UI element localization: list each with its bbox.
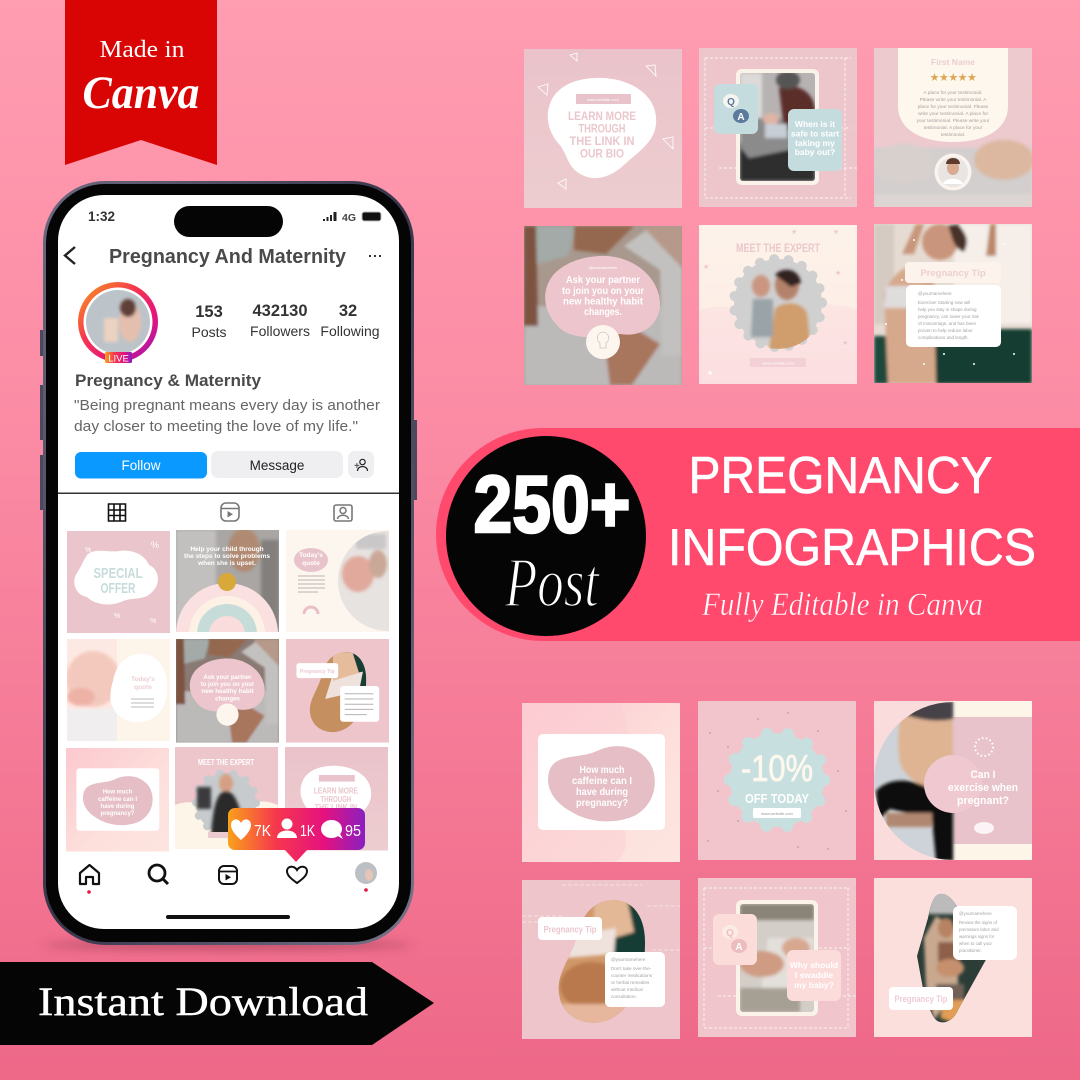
thumbnail: rainbow tip: when she is upset. xyxy=(197,560,256,567)
tile: pregnancy tip diamond: Pregnancy Tip xyxy=(894,994,948,1004)
tile: testimonial xyxy=(874,48,1034,208)
tile: pregnancy tip exercise: @yournamehere xyxy=(918,291,952,296)
thumbnail: today's quote: Today's xyxy=(299,552,323,559)
bio xyxy=(74,371,380,435)
stats: 153 xyxy=(195,303,223,321)
thumbnail: pregnancy tip: Pregnancy Tip xyxy=(300,669,335,675)
status bar: 1:32 xyxy=(88,209,115,224)
status bar xyxy=(88,206,381,237)
stats: 432130 xyxy=(252,302,308,320)
tile: meet the expert: ★ xyxy=(833,228,839,236)
thumbnail: caffeine question xyxy=(66,748,169,852)
thumbnail: today's quote xyxy=(286,530,389,632)
tile: ask your partner: new healthy habit xyxy=(563,296,644,308)
tile: question with stroller photo: taking my xyxy=(795,138,835,148)
avatar with live badge xyxy=(78,282,158,364)
thumbnail: baby quote: Today's xyxy=(131,676,155,683)
thumbnail: special offer: SPECIAL xyxy=(94,565,142,582)
tile: pregnancy tip diamond xyxy=(874,878,1032,1037)
title text: PREGNANCY xyxy=(688,447,992,505)
tile: testimonial: place for your testimonial. Please xyxy=(918,104,989,110)
thumbnail: caffeine question: have during xyxy=(101,803,134,810)
bio: day closer to meeting the love of my life." xyxy=(74,418,358,435)
thumbnail: special offer xyxy=(67,531,170,633)
tile: pregnancy tip exercise: Exercise! Starting now will xyxy=(918,300,970,305)
tile: question with stroller photo: A xyxy=(737,112,745,123)
tile: ask your partner xyxy=(524,226,682,386)
tile: ask your partner: Ask your partner xyxy=(566,275,640,286)
tile: swaddle question: Why should xyxy=(790,960,838,970)
bio: Pregnancy & Maternity xyxy=(75,371,262,390)
tile: swaddle question: my baby? xyxy=(794,980,834,990)
tile: caffeine question: pregnancy? xyxy=(576,798,628,809)
tab bar xyxy=(58,492,399,521)
tile: caffeine question: caffeine can I xyxy=(572,776,632,787)
thumbnail: baby quote: quote xyxy=(134,684,152,691)
bottom template group xyxy=(522,701,1032,1039)
tile: pregnancy tip belly xyxy=(522,880,681,1039)
ribbon: Made in Canva: Made in xyxy=(100,37,184,63)
phone post grid xyxy=(66,528,389,852)
thumbnail: rainbow tip: Help your child through xyxy=(190,546,264,553)
tile: question with stroller photo: Q xyxy=(727,97,735,108)
bio: "Being pregnant means every day is another xyxy=(74,397,380,414)
tile: testimonial: write your testimonial. A place for xyxy=(918,111,988,117)
tile: pregnancy tip exercise: proven to help reduce labor xyxy=(918,328,973,333)
tile: testimonial: First Name xyxy=(931,57,975,67)
tile: meet the expert: ★ xyxy=(791,228,797,236)
engagement bubble: 1K xyxy=(300,823,315,840)
tile: pregnancy tip diamond: practitioner. xyxy=(959,948,982,953)
tile: learn more: www.website.com xyxy=(587,97,620,102)
tile: pregnancy tip exercise xyxy=(874,224,1032,384)
tile: discount: -10% xyxy=(741,748,813,789)
phone mockup xyxy=(40,181,417,949)
stats: Posts xyxy=(191,324,227,340)
tile: ask your partner: to join you on your xyxy=(562,286,644,297)
tile: exercise question: exercise when xyxy=(948,782,1018,794)
thumbnail: special offer: % xyxy=(85,547,91,554)
tile: pregnancy tip diamond: when to call your xyxy=(959,941,992,946)
tile: pregnancy tip exercise: help you stay in shape during xyxy=(918,307,977,312)
tile: learn more: LEARN MORE xyxy=(568,109,636,123)
ribbon: Made in Canva: Canva xyxy=(82,67,200,119)
tile: meet the expert: MEET THE EXPERT xyxy=(736,241,821,255)
thumbnail: special offer: % xyxy=(150,618,156,625)
tile: meet the expert: ★ xyxy=(707,369,713,377)
engagement bubble: 95 xyxy=(345,823,361,840)
tile: pregnancy tip belly: Pregnancy Tip xyxy=(544,924,597,934)
stats: Followers xyxy=(250,323,310,339)
tile: caffeine question xyxy=(522,703,681,862)
tile: caffeine question: have during xyxy=(576,787,628,798)
tile: discount xyxy=(698,701,857,860)
top template group xyxy=(524,48,1034,386)
thumbnail: caffeine question: How much xyxy=(103,789,132,796)
tile: meet the expert: ★ xyxy=(835,269,841,277)
engagement bubble xyxy=(228,808,365,862)
tile: exercise question: pregnant? xyxy=(957,795,1009,807)
tile: question with stroller photo: safe to start xyxy=(791,128,839,138)
avatar with live badge: LIVE xyxy=(108,354,129,364)
tile: exercise question: Can I xyxy=(970,769,996,781)
tile: discount: OFF TODAY xyxy=(745,791,809,806)
bottom navigation xyxy=(80,862,377,919)
tile: learn more: OUR BIO xyxy=(580,146,624,160)
tile: learn more: THE LINK IN xyxy=(570,134,634,148)
tile: testimonial: your testimonial. Please write your xyxy=(916,118,990,124)
tile: learn more: THROUGH xyxy=(578,122,626,136)
tile: pregnancy tip belly: counter medications xyxy=(611,973,653,978)
tile: meet the expert: www.website.com xyxy=(762,360,795,366)
tile: ask your partner: changes. xyxy=(584,307,622,318)
badge: 250+ post: Post xyxy=(504,545,600,622)
banner: instant download xyxy=(0,962,434,1045)
thumbnail: baby quote xyxy=(66,639,170,741)
status bar: 4G xyxy=(342,212,356,224)
title text: INFOGRAPHICS xyxy=(668,519,1036,577)
tile: meet the expert xyxy=(699,225,857,385)
thumbnail: rainbow tip xyxy=(176,530,279,632)
tile: pregnancy tip diamond: @yournamehere xyxy=(959,911,992,916)
thumbnail: meet the expert xyxy=(175,747,278,849)
tile: pregnancy tip belly: Don't take over-the- xyxy=(611,966,652,971)
tile: pregnancy tip exercise: complications and length. xyxy=(918,335,969,340)
banner: instant download: Instant Download xyxy=(38,979,368,1024)
badge: 250+ post: 250+ xyxy=(474,460,630,550)
tile: meet the expert: ★ xyxy=(703,263,709,271)
tile: swaddle question: Q xyxy=(726,928,734,939)
stats xyxy=(191,302,380,340)
thumbnail: today's quote: quote xyxy=(302,560,320,567)
tile: pregnancy tip belly: or herbal remedies xyxy=(611,980,650,985)
thumbnail: special offer: % xyxy=(114,613,120,620)
thumbnail: partner habit: new healthy habit xyxy=(201,688,254,695)
tile: meet the expert: ★ xyxy=(842,339,848,347)
ribbon: Made in Canva xyxy=(65,0,217,165)
thumbnail: partner habit: Ask your partner xyxy=(203,674,252,681)
thumbnail: learn more: LEARN MORE xyxy=(314,785,358,795)
tile: question with stroller photo: When is it xyxy=(795,119,835,129)
tile: swaddle question: A xyxy=(735,942,743,953)
profile header: Pregnancy And Maternity xyxy=(109,246,347,268)
title text: Fully Editable in Canva xyxy=(701,587,983,623)
tile: caffeine question: How much xyxy=(580,765,624,776)
tile: pregnancy tip diamond: warnings signs for xyxy=(959,934,995,939)
stats: 32 xyxy=(339,302,357,320)
thumbnail: partner habit xyxy=(176,639,279,743)
profile buttons: Follow xyxy=(121,458,161,473)
tile: pregnancy tip belly: consultation. xyxy=(611,994,637,999)
engagement bubble: 7K xyxy=(254,823,271,840)
tile: learn more xyxy=(524,49,682,208)
title text xyxy=(668,447,1036,623)
thumbnail: rainbow tip: the steps to solve problems xyxy=(184,553,270,560)
tile: pregnancy tip belly: @yournamehere xyxy=(611,957,646,962)
tile: testimonial: ★★★★★ xyxy=(930,72,977,84)
thumbnail: meet the expert: MEET THE EXPERT xyxy=(198,758,254,767)
profile buttons: + xyxy=(354,461,360,472)
tile: swaddle question: I swaddle xyxy=(795,970,833,980)
stats: Following xyxy=(320,323,380,339)
thumbnail: pregnancy tip xyxy=(286,639,389,743)
center title banner xyxy=(436,428,1080,641)
thumbnail: caffeine question: pregnancy? xyxy=(101,810,134,817)
badge: 250+ post xyxy=(446,436,646,636)
tile: pregnancy tip exercise: pregnancy, can lower your risk xyxy=(918,314,979,319)
tile: pregnancy tip exercise: Pregnancy Tip xyxy=(920,268,986,279)
thumbnail: special offer: OFFER xyxy=(100,580,136,597)
tile: question with stroller photo: baby out? xyxy=(795,147,835,157)
thumbnail: learn more: THE LINK IN xyxy=(315,802,357,812)
tile: pregnancy tip diamond: Review the signs of xyxy=(959,920,998,925)
thumbnail: partner habit: to join you on your xyxy=(201,681,255,688)
tile: discount: www.website.com xyxy=(761,811,794,816)
profile buttons: Message xyxy=(250,458,304,473)
thumbnail: partner habit: changes xyxy=(215,695,240,702)
tile: testimonial: A place for your testimonial. xyxy=(924,90,982,96)
tile: testimonial: testimonial. xyxy=(941,132,965,138)
tile: swaddle question xyxy=(698,878,857,1037)
thumbnail: learn more xyxy=(285,747,388,851)
tile: ask your partner: @yournamehere xyxy=(589,266,617,270)
tile: question with stroller photo xyxy=(699,48,857,208)
tile: pregnancy tip belly: without medical xyxy=(611,987,643,992)
tile: testimonial: Please write your testimonial. A xyxy=(920,97,987,103)
thumbnail: caffeine question: caffeine can I xyxy=(98,796,137,803)
tile: testimonial: testimonial. A place for your xyxy=(924,125,983,131)
profile buttons xyxy=(75,451,374,478)
thumbnail: special offer: % xyxy=(151,540,159,550)
thumbnail: learn more: THROUGH xyxy=(321,794,351,804)
tile: pregnancy tip diamond: premature labor and xyxy=(959,927,999,932)
tile: pregnancy tip exercise: of miscarriage, and has been xyxy=(918,321,977,326)
tile: exercise question xyxy=(874,701,1032,861)
